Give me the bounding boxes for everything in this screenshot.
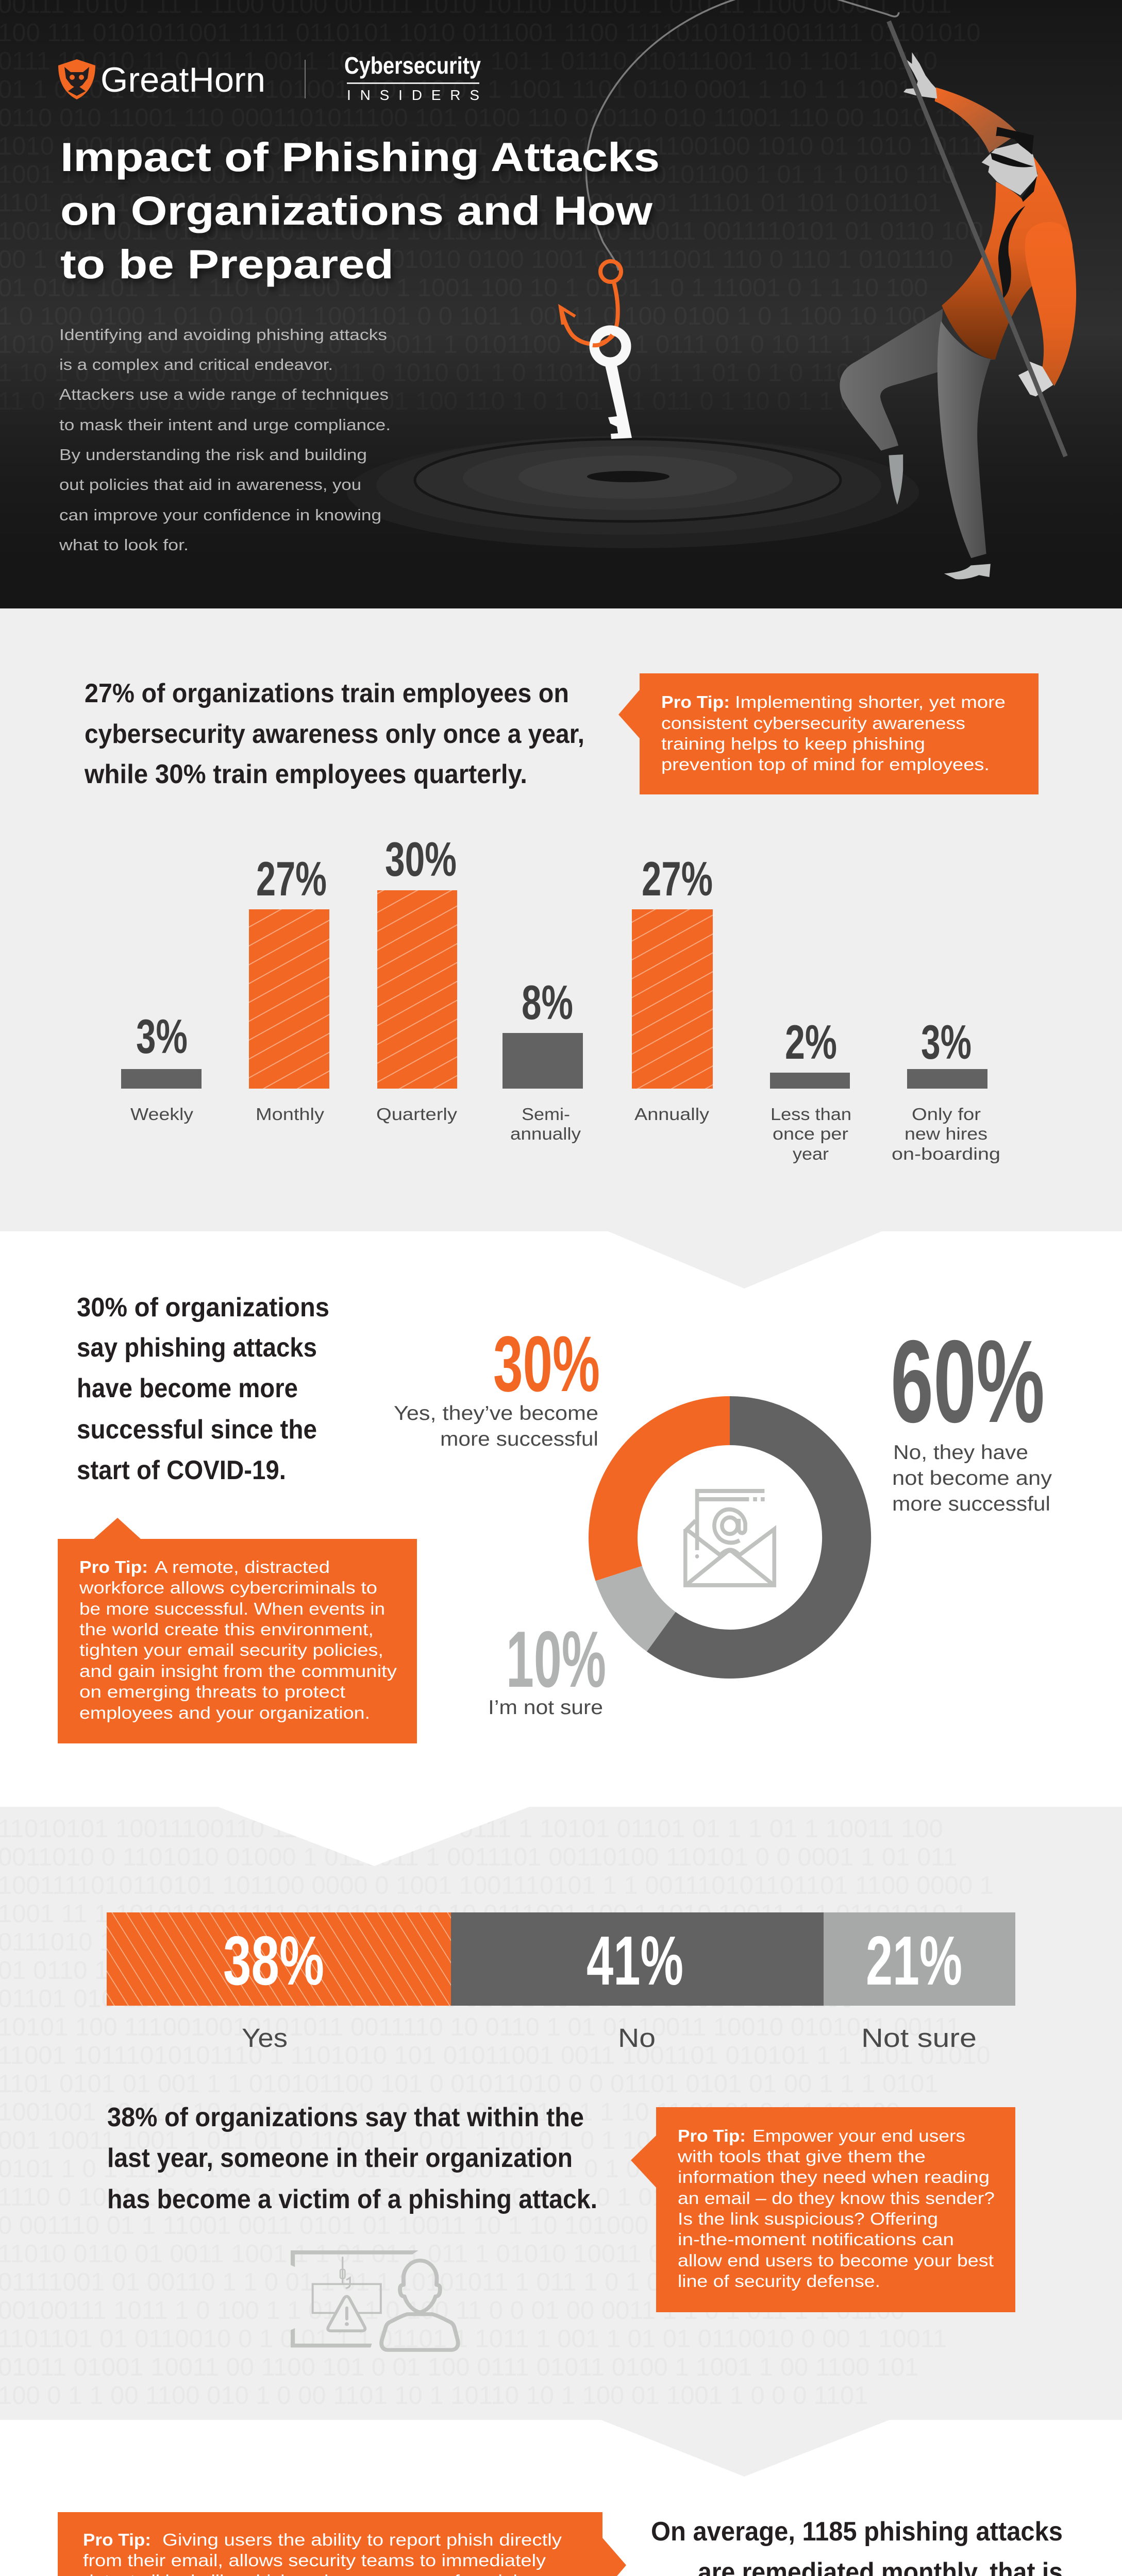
bar chart: training frequency: once per — [773, 1124, 848, 1143]
panel: attacks remediated monthly — [58, 2512, 1063, 2576]
bar chart: training frequency: Quarterly — [376, 1105, 458, 1124]
title: to be Prepared — [60, 241, 394, 287]
callout: pro tip end users: Empower your end users — [752, 2126, 965, 2145]
bar chart: training frequency: 27% — [256, 852, 327, 906]
callout: pro tip end users: Pro Tip: — [678, 2126, 746, 2145]
intro text block: By understanding the risk and building — [59, 446, 367, 464]
donut label: 10 percent: I’m not sure — [488, 1697, 603, 1719]
illustration: fishing line — [586, 0, 899, 270]
panel: victims last year: 0 001110 01 1 11001 0011 0101 01 10011 10 1 10 101000 1 0 0 1 1 1 0 1 1 1 10011 — [0, 2212, 934, 2240]
panel: victims last year: 1110 0 1001 1 0 1 011 01 1 001 1 01 1 1 0 1 00 1 1 1 0 1 01 0 1 1 01 1 1 1 100 — [0, 2183, 877, 2211]
callout: pro tip remote workforce: employees and your organization. — [79, 1703, 370, 1722]
panel: victims last year: 01 0110 1 1 1 0 1 01 1 0 1 1 01 01 0 10 01 1 1 01 1 0 1 1 1 0 1 01 0 1 1 11010 — [0, 1957, 872, 1985]
bar chart: training frequency: Less than — [771, 1105, 851, 1124]
bar chart: training frequency: Annually — [634, 1105, 710, 1124]
callout: pro tip end users: with tools that give them the — [677, 2147, 926, 2166]
donut label: 10 percent — [488, 1615, 606, 1719]
bar chart: training frequency: on-boarding — [892, 1144, 1000, 1163]
bar chart: training frequency: 30% — [385, 832, 457, 886]
intro text block: can improve your confidence in knowing — [59, 506, 381, 524]
panel: header hero: 1010 1 0 1 01 0 10 1 1 01 0 10 11 0011 1 0101100 111 0 1 0111 01 0 10 11 1 1 — [0, 331, 875, 359]
callout: pro tip remote workforce: and gain insight from the community — [79, 1662, 397, 1681]
panel: header hero: 11 0 1 100 10 010 0 1 0 11 1 1 01 01 100 110 1 0 1 01 1 1 011 0 1 10 0 1 1 0 1 — [0, 387, 875, 415]
bar chart: training frequency: 2% — [785, 1015, 837, 1069]
callout: pro tip end users: an email – do they know this sender? — [678, 2189, 995, 2208]
illustration: fish hook — [560, 261, 621, 344]
donut label: 30 percent: Yes, they’ve become — [394, 1402, 598, 1425]
title: Impact of Phishing Attacks — [60, 134, 660, 180]
intro text block: to mask their intent and urge compliance. — [59, 416, 391, 434]
bar chart: training frequency: 3% — [921, 1015, 972, 1069]
panel: header hero: 1101 01 1 10 1 01 1 0 10 10110 01 1 0 1 1101 01 01 01 1001 11101 01 101 0101101 — [0, 189, 942, 217]
donut label: 60 percent — [891, 1316, 1052, 1515]
callout: pro tip training: training helps to keep phishing — [661, 734, 925, 753]
panel: victims last year: 00100111 1011 1 0 100 1 1 01 1 1 0 100 11 0 0 01 00 0011 1 1 0 1 011 1 1 01100 — [0, 2297, 905, 2325]
panel: covid success — [58, 1293, 1052, 1743]
callout: pro tip end users: allow end users to become your best — [678, 2251, 994, 2270]
donut label: 60 percent: 60% — [891, 1316, 1045, 1447]
intro text block: Identifying and avoiding phishing attacks — [59, 326, 387, 344]
logo: Cybersecurity Insiders: INSIDERS — [347, 87, 479, 103]
intro text block — [59, 326, 391, 554]
donut label: 30 percent: more successful — [440, 1428, 598, 1450]
callout: pro tip end users: line of security defense. — [678, 2272, 880, 2291]
callout: pro tip report phish — [58, 2512, 626, 2576]
heading: covid success: 30% of organizations — [77, 1293, 329, 1323]
logo: Cybersecurity Insiders: Cybersecurity — [344, 52, 481, 79]
stacked bar: yes no not sure — [107, 1912, 1015, 2053]
bar chart: training frequency: Semi- — [522, 1105, 570, 1124]
panel: victims last year: 1101101 01 0110010 0 1 0 01 1 1 01101 1 1011 1 001 1 01 01 0110010 0 00 1 10011 — [0, 2325, 947, 2353]
heading: attacks remediated: On average, 1185 phishing attacks — [651, 2517, 1063, 2547]
panel: victims last year: 0011010 0 1101010 01000 1 0110011 1 0011101 00110100 110101 0 0 0001 1 01 011 — [0, 1843, 957, 1871]
panel: victims last year — [0, 1807, 1122, 2477]
heading: covid success — [77, 1293, 329, 1485]
callout: pro tip training: Pro Tip: — [661, 692, 730, 711]
panel: header hero: 01 0101 101 1 1 1 110 0 1 100 100 1 1001 100 10 1 0101 1 0 1 11001 0 1 1 10 100 — [0, 274, 928, 302]
callout: pro tip remote workforce: the world create this environment, — [79, 1620, 374, 1639]
callout: pro tip remote workforce: Pro Tip: — [79, 1557, 148, 1577]
panel: header hero: 100 111 0101011001 1111 0110101 1010 0111001 1100 111101010110011111 01101010 — [0, 19, 981, 47]
panel: victims last year: 1001111010110101 101100 0000 0 1001 1001110101 1 1 001110101101101 1100 0000 1 — [0, 1872, 994, 1900]
panel: training frequency — [0, 608, 1122, 1289]
title: on Organizations and How — [60, 188, 653, 233]
panel: header hero: 0110 010 11001 110 0001101011100 101 0100 110 010110 010 11001 110 00 1010 1100 — [0, 104, 989, 132]
heading: training frequency: while 30% train employees quarterly. — [84, 759, 527, 789]
donut label: 30 percent: 30% — [493, 1320, 600, 1408]
callout: pro tip end users — [631, 2107, 1015, 2312]
callout: pro tip training — [618, 673, 1039, 794]
panel: victims last year: 1101 0101 01 001 1 1 010101100 101 0 01011010 0 0 01101 0101 01 00 1 1 1 0101 — [0, 2070, 939, 2098]
donut label: 30 percent — [394, 1320, 600, 1450]
callout: pro tip training: consistent cybersecurity awareness — [661, 714, 965, 733]
heading: victims last year: 38% of organizations say that within the — [107, 2103, 584, 2132]
panel: victims last year: 0111010 10 1 1 01 1 1 1 0 1 0 01 1 1 10 01 01 100 1 1 10 011 1 0 1 1 0 0 10110 — [0, 1928, 889, 1956]
heading: victims last year: last year, someone in their organization — [107, 2143, 573, 2173]
stacked bar: yes no not sure: Not sure — [861, 2023, 977, 2053]
intro text block: Attackers use a wide range of techniques — [59, 385, 389, 403]
panel: victims last year: 01011 01001 10011 00 1100 101 0 01 100 0111 01011 0100 1 1001 1 00 1100 101 — [0, 2353, 919, 2381]
panel: header hero: 1 0 100 0100 1 01 0 01 001 1001101 0 0 101 1 00111 0 100 0100 1 0 1 100 10 100 — [0, 302, 926, 330]
bar chart: training frequency: annually — [510, 1124, 581, 1143]
stacked bar: yes no not sure: 41% — [587, 1922, 683, 1999]
logo: Cybersecurity Insiders — [344, 52, 481, 103]
bar chart: training frequency: 8% — [522, 975, 573, 1029]
callout: pro tip end users: in-the-moment notifications can — [678, 2230, 954, 2249]
logo: GreatHorn: GreatHorn — [101, 60, 265, 99]
heading: covid success: say phishing attacks — [77, 1333, 317, 1363]
callout: pro tip report phish: Pro Tip: — [83, 2530, 151, 2549]
heading: victims last year — [107, 2103, 597, 2214]
intro text block: what to look for. — [59, 536, 189, 554]
panel: victims last year: 1001001 10 11 0 10 1 010 1 1 01 1 0 1 01 01 001 0 1 1 10 11 01 01 0 1 1 101 00 — [0, 2098, 900, 2126]
panel: victims last year: 01111001 01 00110 1 1 0 01 1 01 1 10101011 1 011 1 0 1 0 1 1 1 0 1 01 001111 — [0, 2268, 887, 2296]
title — [60, 134, 660, 287]
bar chart: training frequency: new hires — [905, 1124, 987, 1143]
callout: pro tip training: Implementing shorter, yet more — [735, 692, 1006, 711]
illustration: vortex hole — [347, 436, 919, 548]
bar chart: training frequency: Monthly — [256, 1105, 325, 1124]
heading: training frequency: cybersecurity awareness only once a year, — [85, 719, 584, 749]
bar chart: training frequency: Only for — [912, 1105, 981, 1124]
panel: header hero: 1010 10011101001 0 010 11100110 101001 10 010 1 10011100100 1010 01 1010 101110 — [0, 132, 999, 160]
panel: victims last year: 11010101 10011100110 11 0 1 10 01 1 1 0111 1 10101 01101 01 1 1 01 1 10011 100 — [0, 1815, 943, 1843]
stacked bar: yes no not sure: Yes — [242, 2023, 288, 2053]
heading: training frequency — [84, 679, 584, 789]
donut label: 60 percent: No, they have — [893, 1442, 1028, 1464]
panel: victims last year: 100 0 1 1 00 1100 010 1 0 00 1101 10 1 10110 10 1 100 01 1001 1 0 0 0 1101 — [0, 2382, 868, 2410]
panel: header hero: 0111 10 010 11 0 011 1 0011 10110 011 1 1 101 1 01110 010111001 10 1 101 10110 — [0, 47, 937, 75]
heading: training frequency: 27% of organizations train employees on — [85, 679, 569, 708]
heading: covid success: successful since the — [77, 1415, 317, 1445]
panel: header hero: 00 1 0011 10 01 1 011 0 1 1 110 1101010 0100 1001 001111001 110 0 110 1 0101110 — [0, 246, 953, 274]
heading: victims last year: has become a victim of a phishing attack. — [107, 2184, 597, 2214]
stacked bar: yes no not sure: No — [618, 2023, 656, 2053]
bar chart: training frequency: 27% — [642, 852, 713, 906]
callout: pro tip remote workforce: on emerging threats to protect — [79, 1682, 345, 1701]
heading: attacks remediated — [651, 2517, 1063, 2576]
panel: victims last year: 11001 10111010101110 1 1101010 101 01011001 0011 1001101 010101 1 1 1101 01010 — [0, 2042, 991, 2070]
panel: victims last year: 1001 11 1 1010110011111 01101010 10 10 0111001 100 1 1010 10011 1 1 01101010 1 — [0, 1900, 967, 1928]
callout: pro tip end users: Is the link suspicious? Offering — [678, 2209, 938, 2228]
stacked bar: yes no not sure: 38% — [223, 1922, 324, 1999]
panel: victims last year: 01101 010 110 1 01 1 1 1 01 1 0 1 1 01 0 01 1 1 10 1 0 1 1 0 001 1 011 1100 — [0, 1985, 854, 2013]
panel: victims last year: 001 10011 1001 1 011 01 0 11001 11 0 01 1 1010 1 0 1 10 1 1 0 1 0 11 01 0010110 — [0, 2127, 928, 2155]
panel: victims last year: 11010 0110 01 0011 1001 1 1 01 01 1 011 1 01010 10011 0 1 01 1 1 0 1 1 1 01100 — [0, 2240, 920, 2268]
panel: victims last year: 10101 100 1110010010101011 0011110 10 0110 1 01 01 10011 10010 0101011 00111 — [0, 2013, 960, 2041]
logo divider — [305, 60, 306, 98]
callout: pro tip remote workforce: A remote, distracted — [155, 1557, 330, 1577]
heading: covid success: have become more — [77, 1374, 298, 1403]
illustration: hacker figure with rod — [840, 21, 1076, 579]
panel: header hero: 1 10 1 0 1 01 01 11010 110 1011 0 1010 01 1 0 11011 0 0 1 1 1 01 0 1 0 110 1 01 — [0, 359, 907, 387]
donut label: 60 percent: not become any — [892, 1467, 1052, 1489]
callout: pro tip remote workforce — [58, 1518, 417, 1743]
illustration: key — [593, 330, 632, 439]
icon: person with screen alert — [291, 2250, 458, 2350]
panel: header hero: 01 1 0 10 1 01 1 1 01 1 101001 1101 10 01 1 1001 1101 0110 0001 1 10 1 1 10011 — [0, 76, 924, 104]
callout: pro tip remote workforce: workforce allows cybercriminals to — [79, 1578, 377, 1597]
stacked bar: yes no not sure: 21% — [866, 1922, 962, 1999]
panel: victims last year: 0101 1 0 1 1110 0 1001 1 0 1 0 01 101 1000 1 1 0 1 0 1 0 1 1 01 1 1 00 0110100 — [0, 2155, 898, 2183]
icon: email — [685, 1491, 774, 1585]
callout: pro tip remote workforce: be more successful. When events in — [79, 1599, 385, 1618]
panel: header hero: 1001001 0011 01101 01101 01 01 1 1 0110 10 0101100 10011 0011110101 01 0110 100 — [0, 217, 983, 245]
bar chart: training frequency: 3% — [136, 1009, 188, 1063]
donut chart: success since covid — [613, 1421, 847, 1654]
donut label: 10 percent: 10% — [506, 1615, 606, 1704]
callout: pro tip report phish: Giving users the ability to report phish directly — [162, 2530, 562, 2549]
panel: header hero: 1001 1 0 11 0 011001 101 101 10110010 01 01 1 1001 1 10101100 1 01 1 1 0110 110 — [0, 161, 956, 189]
bar chart: training frequency: Weekly — [130, 1105, 194, 1124]
callout: pro tip report phish: from their email, allows security teams to immediately — [83, 2551, 546, 2570]
panel: header hero — [0, 0, 1122, 608]
donut label: 60 percent: more successful — [892, 1493, 1050, 1515]
callout: pro tip end users: information they need when reading — [678, 2167, 990, 2187]
heading: covid success: start of COVID-19. — [77, 1455, 286, 1485]
bar chart: training frequency — [121, 832, 1000, 1163]
callout: pro tip training: prevention top of mind for employees. — [661, 755, 990, 774]
intro text block: is a complex and critical endeavor. — [59, 355, 333, 374]
bar chart: training frequency: year — [793, 1144, 829, 1163]
callout: pro tip remote workforce: tighten your email security policies, — [79, 1640, 383, 1659]
intro text block: out policies that aid in awareness, you — [59, 476, 361, 494]
